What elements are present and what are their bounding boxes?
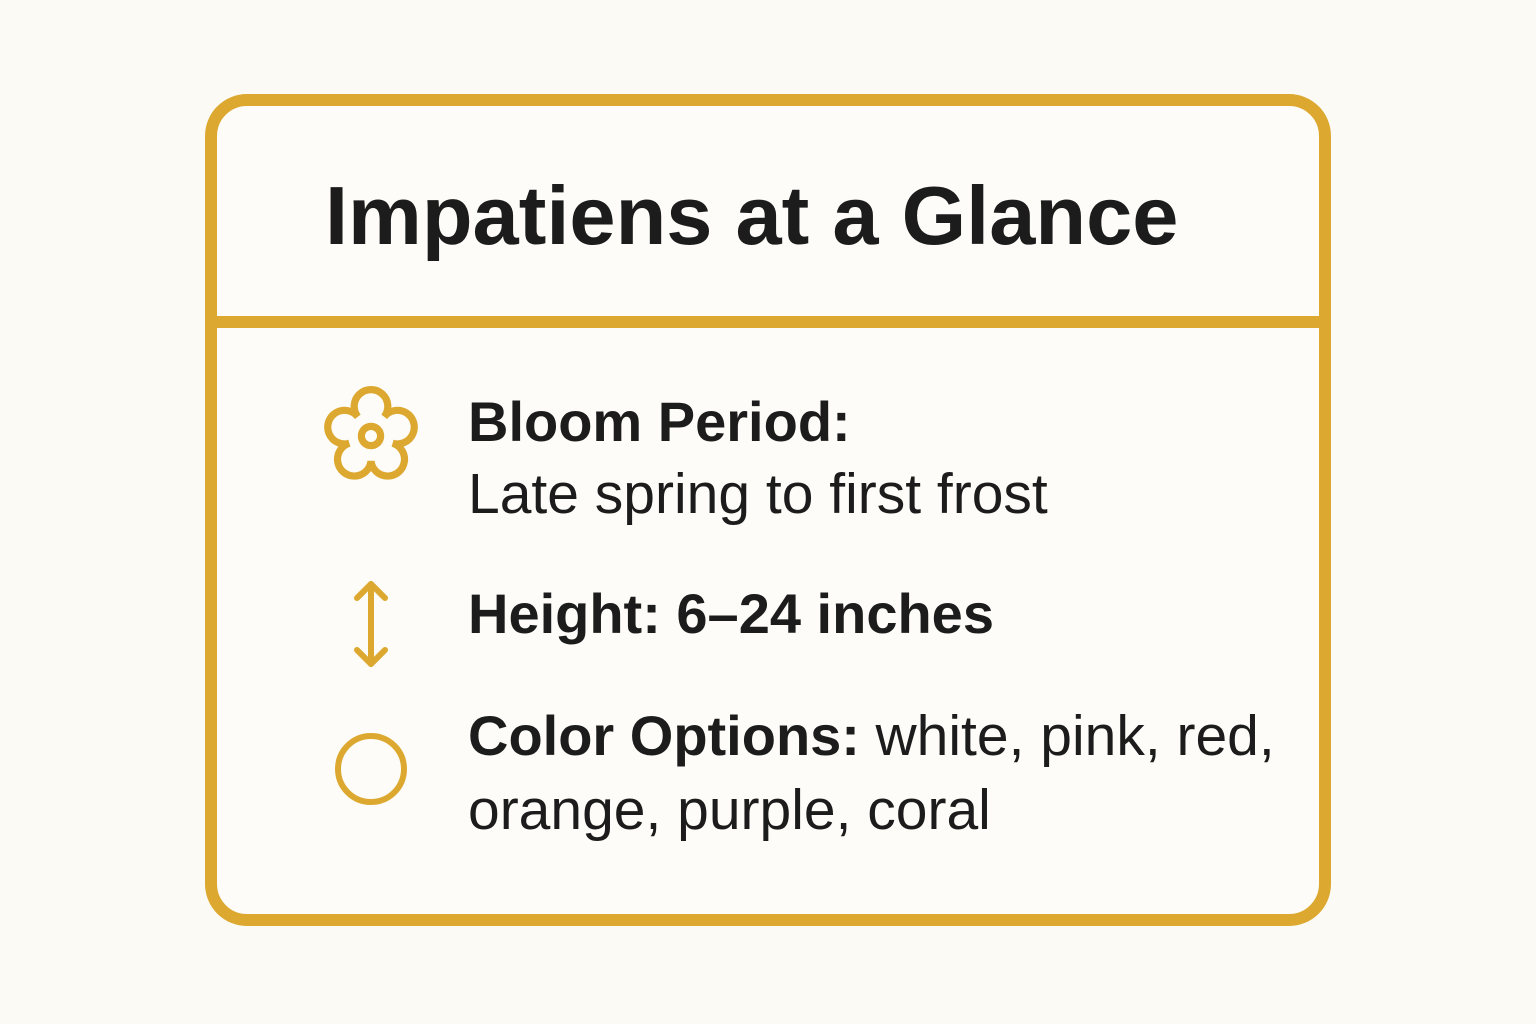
panel: info card	[205, 94, 1331, 926]
text: height: Height: 6–24 inches	[468, 582, 994, 645]
text: bloom period: Late spring to first frost	[468, 462, 1048, 526]
text: bloom period: Bloom Period:	[468, 390, 851, 453]
icon: flower	[324, 386, 418, 480]
icon: color circle	[335, 733, 407, 805]
icon: height arrow	[354, 581, 388, 667]
text: color options	[468, 704, 1275, 842]
text: color options: Color Options: white, pink, red,	[468, 704, 1275, 768]
text: bloom period	[468, 390, 1048, 526]
title: Impatiens at a Glance	[325, 169, 1178, 262]
text: color options: orange, purple, coral	[468, 778, 991, 842]
